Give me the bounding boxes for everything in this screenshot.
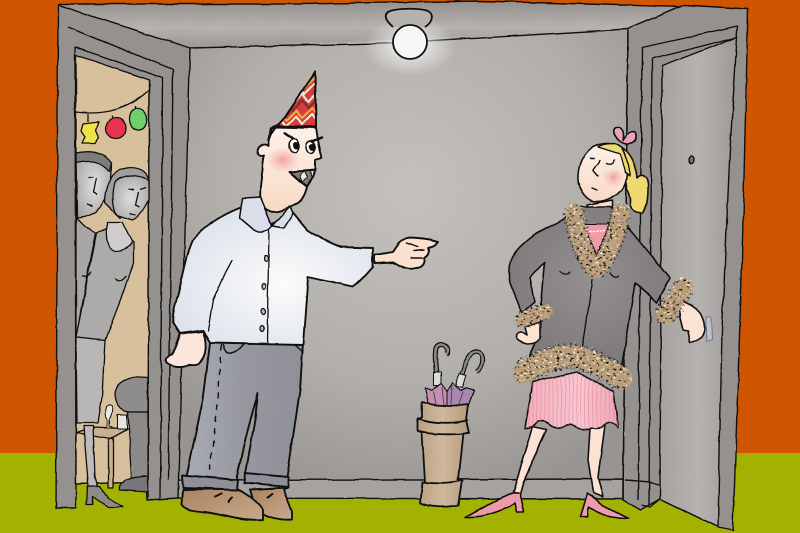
hair stubble [268,125,278,140]
stand body [417,402,469,507]
door edge [625,480,660,507]
hair bow [614,127,636,144]
back wall [178,30,628,500]
red bauble [106,118,126,138]
stand bands [417,418,468,483]
trouser cuffs [182,475,238,490]
green bauble [129,108,147,130]
jacket seam [560,271,619,350]
pink top [583,224,610,255]
shoes [250,488,292,520]
skirting board [178,479,623,499]
ponytail [620,146,648,213]
lamp fitting [386,9,432,27]
ceiling lamp [364,9,456,76]
door knob [706,317,712,342]
umbrella stand [417,345,483,507]
armchair [115,377,148,412]
ceiling [58,2,750,48]
tumbler [118,415,127,429]
left frame lines [68,27,173,498]
head [578,143,627,202]
hem fur [524,356,622,378]
lamp globe [393,25,427,59]
head [257,127,322,211]
neck [587,200,612,225]
angry man [166,72,438,520]
collar [240,197,293,232]
guest neck [107,222,132,251]
bunting string [76,90,149,113]
fur trims [522,212,684,378]
shirt [173,208,373,345]
lamp glow [364,16,456,76]
door [660,37,737,527]
hair fringe [598,144,630,176]
left hand [166,331,206,367]
glass [105,405,114,428]
cuff fur left [522,311,546,320]
ceiling outline [58,1,748,48]
right frame lines [623,26,738,505]
pointing hand [375,238,438,269]
eyes and brows [285,133,322,141]
right hand on knob [678,300,704,343]
right door frame [623,5,748,530]
cuff fur right [665,287,684,315]
pleated skirt [525,372,618,430]
face details [590,158,614,190]
party hat [278,70,318,128]
jacket [509,207,670,367]
paper lantern [81,122,99,143]
shirt details [208,230,269,343]
party room opening [76,55,149,484]
left door frame [56,5,190,508]
left hand on hip [516,322,540,344]
umbrella tips [434,372,466,388]
woman [465,127,712,518]
guest leg [84,426,98,488]
green floor [0,453,800,533]
blush [601,167,625,187]
umbrella handles [435,345,483,378]
shouting mouth [290,170,315,187]
front guest [76,168,149,507]
buttons [260,256,268,332]
pink shoes [465,493,628,518]
guest body [76,228,133,340]
back guest [76,152,112,340]
trousers [186,343,303,480]
guest shoe [87,487,123,507]
guest skirt [76,337,105,423]
party guests and room [76,90,149,507]
cheek [266,147,300,173]
side table [76,427,128,488]
trouser seam [210,345,221,470]
umbrellas [425,383,474,407]
collar fur [574,212,621,270]
legs [513,425,605,497]
